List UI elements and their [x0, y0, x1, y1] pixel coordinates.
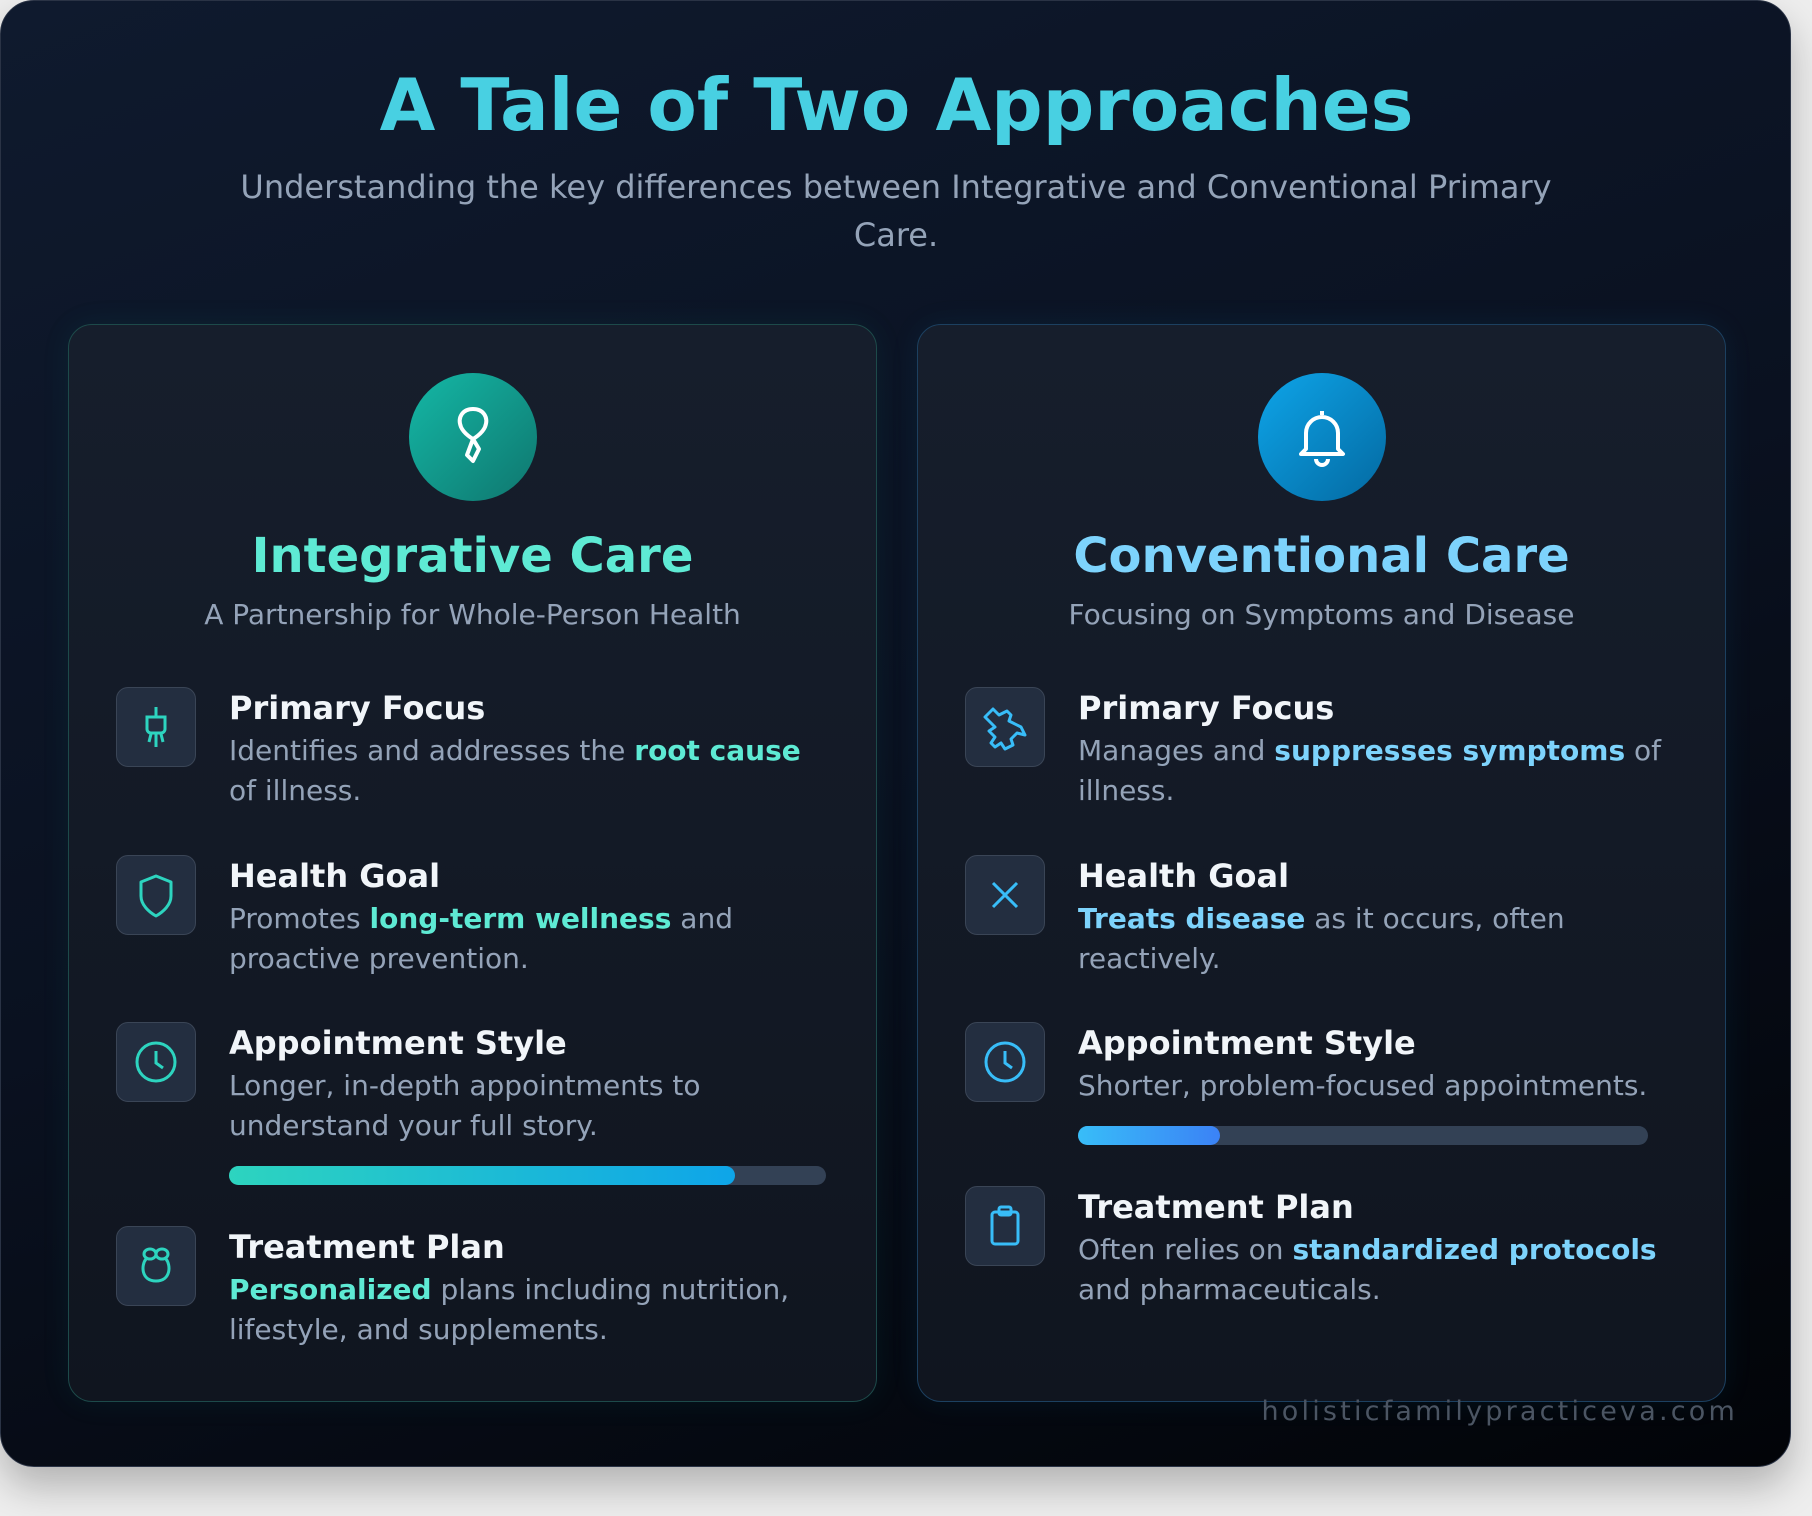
item: appointment style: [116, 1022, 826, 1185]
icon: bell: [1258, 373, 1386, 501]
item: appointment style: Appointment Style: [1078, 1024, 1416, 1062]
subheading: Focusing on Symptoms and Disease: [1069, 598, 1574, 631]
subtitle: Understanding the key differences between Integrative and Conventional Primary Care.: [240, 168, 1552, 254]
item: health goal: Health Goal: [1078, 857, 1289, 895]
item: treatment plan: Treatment Plan: [229, 1228, 505, 1266]
watermark: holisticfamilypracticeva.com: [1261, 1396, 1738, 1427]
item: primary focus: [116, 687, 801, 807]
item: primary focus: Primary Focus: [1078, 689, 1334, 727]
item: primary focus: Manages and suppresses symptoms of illness.: [1078, 734, 1661, 807]
item: health goal: Health Goal: [229, 857, 440, 895]
item: treatment plan: Personalized plans including nutrition, lifestyle, and supplements.: [229, 1273, 789, 1346]
progress bar: [1078, 1126, 1648, 1145]
item: primary focus: [965, 687, 1662, 807]
icon: clock: [116, 1022, 196, 1102]
item: health goal: [965, 855, 1565, 975]
item: primary focus: Primary Focus: [229, 689, 485, 727]
icon: pill: [965, 687, 1045, 767]
subheading: A Partnership for Whole-Person Health: [204, 598, 741, 631]
item: treatment plan: Treatment Plan: [1078, 1188, 1354, 1226]
progress bar: [229, 1166, 826, 1185]
item: health goal: Treats disease as it occurs, often reactively.: [1078, 902, 1565, 975]
item: treatment plan: [116, 1226, 789, 1346]
item: health goal: Promotes long-term wellness and proactive prevention.: [229, 902, 733, 975]
panel: integrative care: [68, 324, 877, 1402]
item: appointment style: Shorter, problem-focused appointments.: [1078, 1069, 1647, 1102]
heading: Integrative Care: [252, 528, 693, 584]
icon: x: [965, 855, 1045, 935]
item: treatment plan: Often relies on standardized protocols and pharmaceuticals.: [1078, 1233, 1657, 1306]
title: A Tale of Two Approaches: [380, 63, 1413, 147]
icon: fruit: [116, 1226, 196, 1306]
item: health goal: [116, 855, 733, 975]
icon: integrative: [409, 373, 537, 501]
icon: clipboard: [965, 1186, 1045, 1266]
item: appointment style: Longer, in-depth appointments to understand your full story.: [229, 1069, 700, 1142]
heading: Conventional Care: [1073, 528, 1570, 584]
item: treatment plan: [965, 1186, 1657, 1306]
item: primary focus: Identifies and addresses the root cause of illness.: [229, 734, 801, 807]
icon: plug: [116, 687, 196, 767]
icon: shield: [116, 855, 196, 935]
panel: conventional care: [917, 324, 1726, 1402]
item: appointment style: [965, 1022, 1648, 1145]
icon: clock: [965, 1022, 1045, 1102]
item: appointment style: Appointment Style: [229, 1024, 567, 1062]
